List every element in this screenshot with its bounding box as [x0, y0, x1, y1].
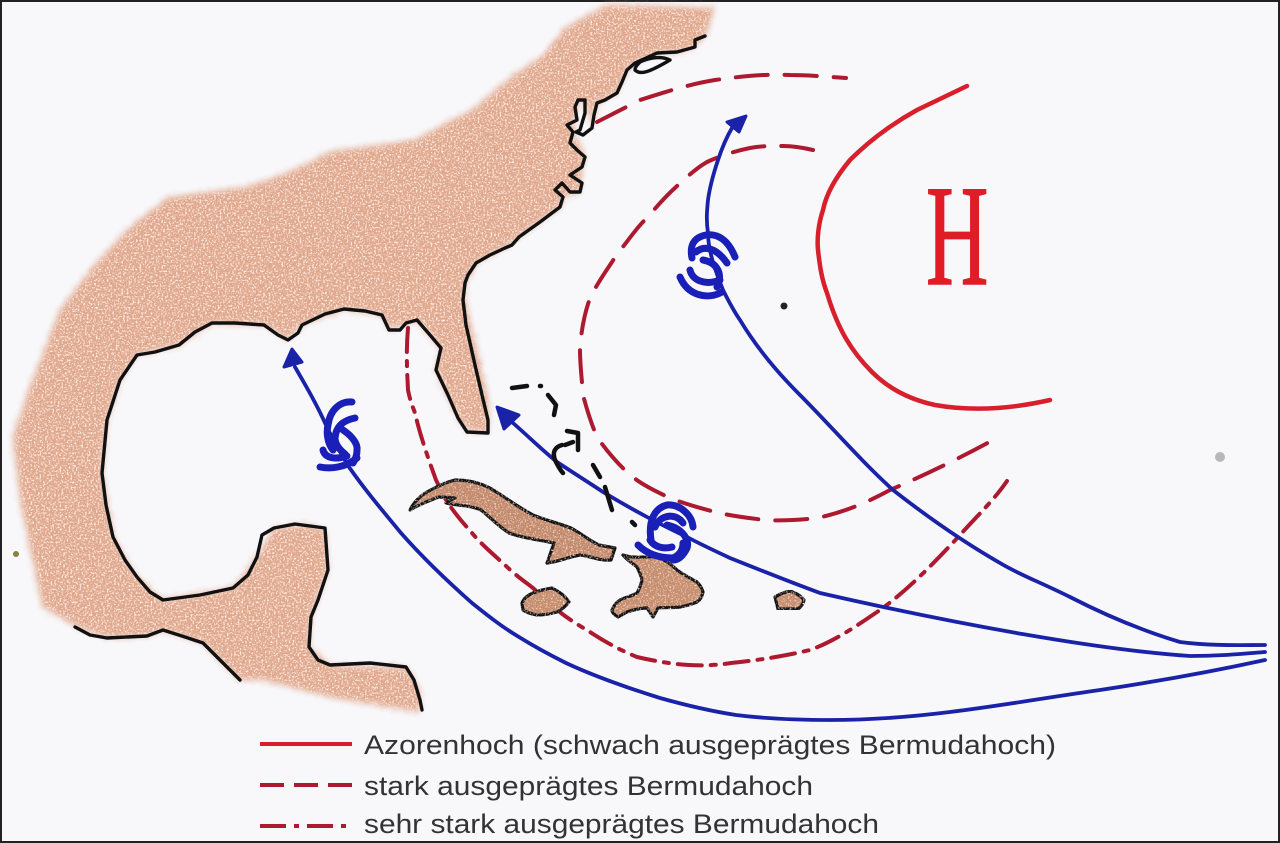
hurricane: north [680, 235, 735, 296]
Cuba [410, 480, 615, 563]
hurricane symbols [320, 235, 735, 560]
legend item: very strong Bermuda high: sehr stark ausgeprägtes Bermudahoch [364, 809, 879, 839]
coast: Mexico south [75, 627, 240, 680]
Azores high isobar [818, 86, 1050, 409]
strong Bermuda high isobars [580, 75, 993, 520]
legend item: strong Bermuda high: stark ausgeprägtes Bermudahoch [364, 771, 813, 801]
dashed isobar: main arc [580, 146, 993, 520]
hurricane tracks [295, 128, 1265, 720]
Hispaniola [612, 555, 703, 617]
track: middle [513, 423, 1265, 656]
land: North America shading [13, 5, 715, 712]
track: south [295, 367, 1265, 720]
islands: Bahamas [512, 386, 635, 525]
Jamaica [522, 588, 569, 615]
Puerto Rico [775, 591, 804, 609]
hurricane: south [320, 402, 357, 468]
dashed isobar: north [597, 75, 846, 122]
legend item: Azores high: Azorenhoch (schwach ausgeprägtes Bermudahoch) [364, 730, 1056, 760]
H label: H [926, 155, 988, 316]
arrowhead: north [727, 116, 746, 132]
marker: Azores dot [780, 302, 788, 310]
very strong Bermuda high isobar [407, 328, 1007, 665]
paper marks [13, 452, 1225, 557]
hurricane: middle [638, 505, 693, 560]
track arrowheads [284, 116, 746, 429]
arrowhead: south [284, 349, 302, 367]
coast: US east and Gulf [102, 36, 705, 710]
arrowhead: middle [497, 407, 519, 429]
isle: Long Island [635, 58, 670, 73]
track: north [707, 128, 1265, 645]
coastline [75, 36, 705, 710]
legend [260, 730, 1056, 839]
